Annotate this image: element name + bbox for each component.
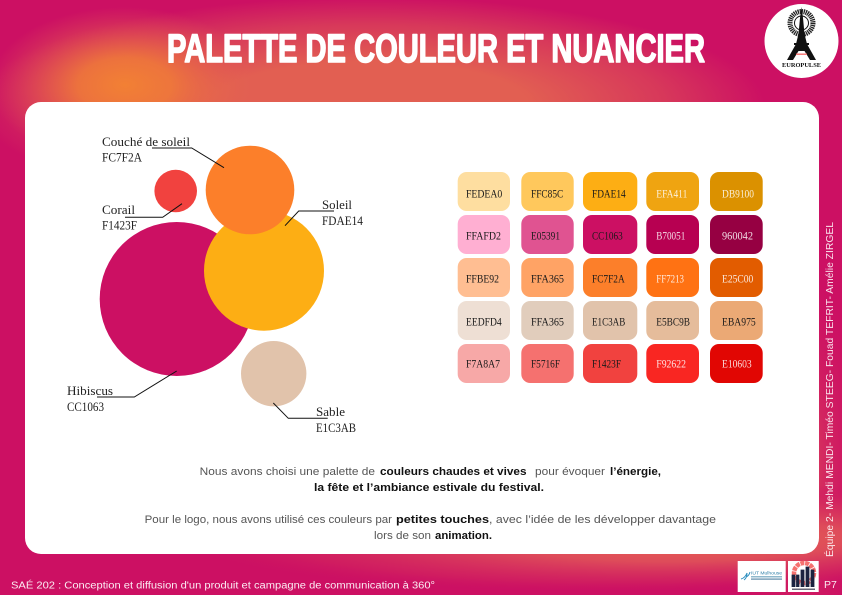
callout: Soleil: FDAE14 [322, 214, 364, 228]
text block: palette explanation: pour évoquer [535, 466, 605, 478]
logo: MMI gear [788, 561, 819, 592]
swatch row 2: 960042 [722, 230, 753, 242]
swatch row 3: FFA365 [531, 274, 564, 286]
callout: Soleil [285, 198, 364, 228]
swatch row 2: FFAFD2 [466, 230, 501, 242]
logo: IUT Mulhouse [738, 561, 786, 592]
circle: Sable [241, 341, 306, 406]
text block: palette explanation: l’énergie, [610, 466, 661, 478]
swatch row 1: FFC85C [531, 188, 564, 200]
swatch row 3: FC7F2A [592, 274, 625, 286]
swatch row 1: FEDEA0 [466, 188, 503, 200]
callout: Hibiscus: CC1063 [67, 400, 104, 414]
icon: Europulse logo [764, 4, 838, 78]
text block: palette explanation: la fête et l’ambiance estivale du festival. [314, 482, 544, 494]
callout: Couché de soleil: Couché de soleil [102, 135, 191, 149]
footer: course title: SAÉ 202 : Conception et diffusion d'un produit et campagne de communication à 360° [11, 578, 435, 592]
swatch row 2: E05391 [531, 230, 560, 242]
circle: Hibiscus [100, 222, 254, 376]
text block: palette explanation: couleurs chaudes et vives [380, 466, 526, 478]
callout: Sable: E1C3AB [316, 421, 356, 435]
swatch row 1: EFA411 [656, 188, 687, 200]
callout: Hibiscus: Hibiscus [67, 384, 113, 398]
callout: Sable: Sable [316, 405, 345, 419]
icon: Europulse logo: EUROPULSE [782, 62, 821, 69]
swatch row 4: EBA975 [722, 316, 756, 328]
swatch row 1: FDAE14 [592, 188, 626, 200]
page number: P7 [824, 579, 837, 591]
callout: Soleil: Soleil [322, 198, 353, 212]
swatch row 4 [458, 301, 763, 340]
swatch row 4: FFA365 [531, 316, 564, 328]
text block: palette explanation: Nous avons choisi une palette de [200, 466, 375, 478]
circle: Couché de soleil [206, 146, 294, 234]
swatch row 1 [458, 172, 763, 211]
swatch row 2: CC1063 [592, 230, 623, 242]
text block: logo explanation: petites touches [396, 514, 489, 526]
swatch row 4: E1C3AB [592, 316, 626, 328]
callout: Sable [273, 403, 356, 435]
callout: Couché de soleil: FC7F2A [102, 150, 142, 164]
callout: Corail: Corail [102, 203, 136, 217]
callout: Corail: F1423F [102, 218, 137, 232]
swatch row 4: E5BC9B [656, 316, 690, 328]
swatch row 5: F7A8A7 [466, 358, 500, 370]
colour swatch grid [458, 172, 763, 383]
swatch row 3: FF7213 [656, 274, 684, 286]
bubble chart: main colours [100, 146, 324, 406]
callout: Couché de soleil [102, 135, 224, 168]
swatch row 3: E25C00 [722, 274, 754, 286]
text block: logo explanation: Pour le logo, nous avons utilisé ces couleurs par [145, 514, 392, 526]
text block: logo explanation: animation. [435, 530, 492, 542]
circle: Soleil [204, 211, 324, 331]
swatch row 5: F1423F [592, 358, 621, 370]
panel: white card [25, 102, 819, 554]
text block: logo explanation: lors de son [374, 530, 431, 542]
text block: logo explanation [145, 514, 716, 542]
logo: IUT Mulhouse: IUT Mulhouse [751, 570, 783, 576]
swatch row 2 [458, 215, 763, 254]
swatch row 5: F92622 [656, 358, 686, 370]
callout: Hibiscus [67, 371, 177, 414]
vertical credits: Équipe 2- Mehdi MENDI- Timéo STEEG- Fouad TEFRIT- Amélie ZIRGEL [823, 222, 836, 557]
text block: logo explanation: , avec l’idée de les développer davantage [489, 514, 716, 526]
swatch row 3 [458, 258, 763, 297]
swatch row 5 [458, 344, 763, 383]
swatch row 4: EEDFD4 [466, 316, 502, 328]
text block: palette explanation [200, 466, 661, 494]
callout: Corail [102, 203, 182, 232]
swatch row 5: F5716F [531, 358, 560, 370]
swatch row 5: E10603 [722, 358, 752, 370]
swatch row 3: FFBE92 [466, 274, 499, 286]
swatch row 1: DB9100 [722, 188, 754, 200]
swatch row 2: B70051 [656, 230, 685, 242]
circle: Corail [154, 170, 197, 212]
